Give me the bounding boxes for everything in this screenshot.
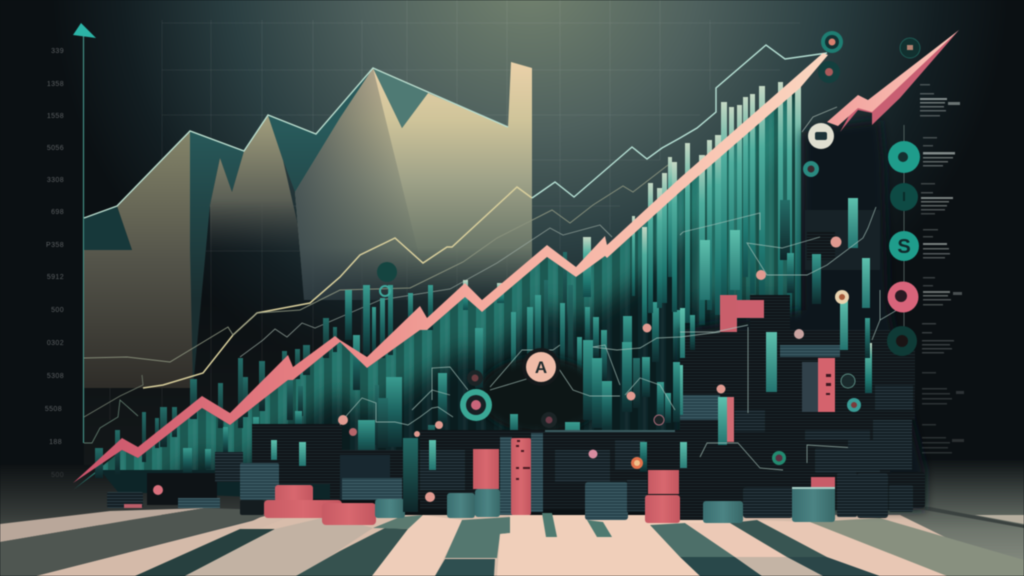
stack dark xyxy=(627,480,647,512)
icon: small teal xyxy=(803,161,819,177)
axis labels: 188 xyxy=(49,439,62,446)
area top line xyxy=(84,68,508,218)
base centre floor xyxy=(0,515,1024,576)
cylinder: pink tall xyxy=(473,449,499,489)
area: left fade on large tan xyxy=(295,68,430,300)
stack: left low xyxy=(178,498,220,508)
stripe: right dark teal xyxy=(680,557,762,576)
floor left xyxy=(0,465,300,576)
stripe: centre dark teal xyxy=(435,559,495,576)
y axis line xyxy=(82,36,84,443)
main rising arrow xyxy=(73,53,828,483)
caption 8 xyxy=(922,424,964,454)
icon: mid right rings xyxy=(772,374,861,465)
cylinder: pink dotted xyxy=(511,438,531,515)
line: grey lower xyxy=(240,225,612,357)
line: grey upper xyxy=(84,165,668,362)
pink blocks xyxy=(720,295,835,487)
icon: small pink dots xyxy=(153,236,842,502)
axis labels: 5056 xyxy=(47,145,64,152)
striped column xyxy=(500,437,512,515)
stripe: right pale xyxy=(685,523,787,557)
area: teal wedge xyxy=(190,131,244,388)
axis labels: 698 xyxy=(51,209,64,216)
icon: dark teal two xyxy=(890,183,918,211)
stripe: left band grey xyxy=(0,508,270,576)
area: middle tan xyxy=(210,115,304,252)
icon: cream disk xyxy=(835,290,849,304)
cylinder: pink lower right xyxy=(645,495,680,523)
line: mint xyxy=(532,45,827,198)
arrow tail line xyxy=(802,107,837,132)
axis labels: 500 xyxy=(51,472,64,479)
stripe: dark slanted xyxy=(135,529,275,576)
stripe: right pale low xyxy=(735,557,823,576)
cylinder: teal low xyxy=(703,501,743,523)
icon: top teal ring xyxy=(821,31,843,53)
arrow: dark lower facet xyxy=(840,30,959,132)
side captions xyxy=(920,84,964,454)
second pink arrow xyxy=(802,30,959,132)
caption 5 xyxy=(923,277,962,306)
dark base under arrow xyxy=(100,88,802,500)
teal glow under arrow xyxy=(73,88,803,500)
cylinder: teal big xyxy=(792,487,835,522)
stripe: right teal xyxy=(650,523,735,557)
striped column right xyxy=(531,433,543,512)
axis labels: 1358 xyxy=(47,81,64,88)
axis labels: 5308 xyxy=(47,373,64,380)
axis labels xyxy=(45,48,64,479)
stack right of centre xyxy=(585,482,628,520)
area: large tan xyxy=(295,62,532,300)
tall teal column xyxy=(403,438,418,512)
stripe: long pale right xyxy=(758,520,947,576)
axis labels: P358 xyxy=(46,242,64,249)
caption 3 xyxy=(921,183,953,214)
icon: salmon letter disk: A xyxy=(535,358,547,377)
line: lower left second xyxy=(84,400,138,443)
icon: dark disk xyxy=(887,326,917,356)
stacks dark right xyxy=(680,468,723,520)
line: yellow xyxy=(143,187,532,388)
connector spine xyxy=(903,125,905,330)
stripe: pale long xyxy=(37,516,292,576)
stripe: olive small xyxy=(373,515,423,529)
stack: dark base xyxy=(240,500,264,515)
stack left of centre xyxy=(342,478,402,500)
icon bubbles xyxy=(153,31,920,502)
stripe: pale center-left xyxy=(372,515,463,576)
icon: dark bubbles xyxy=(377,262,664,428)
dark circuit blocks xyxy=(147,210,915,510)
cylinder: pink upper right xyxy=(648,470,679,494)
pink cylinders and stacks xyxy=(107,420,925,525)
floor stripes xyxy=(0,505,1024,576)
area: teal notch xyxy=(373,68,428,128)
floor right xyxy=(760,460,1024,576)
cylinder: pink top xyxy=(275,485,313,502)
axis labels: 1558 xyxy=(47,113,64,120)
icon: pink disk xyxy=(888,282,918,312)
cylinder: teal xyxy=(375,499,405,518)
stripe: far right light xyxy=(975,515,1024,524)
caption 4 xyxy=(923,229,950,258)
caption 6 xyxy=(922,323,954,354)
group: small left stack xyxy=(107,492,143,508)
cylinder: pink wide xyxy=(264,500,342,518)
dark block field on right xyxy=(680,120,925,510)
icon: dark teal xyxy=(818,61,840,83)
icon: salmon letter disk xyxy=(522,348,560,386)
caption 1 xyxy=(920,84,960,116)
small pink tag xyxy=(124,504,142,508)
icon: orange glow xyxy=(631,457,643,469)
stripe: pale gray xyxy=(185,516,373,576)
secondary trend lines xyxy=(84,45,827,443)
icon: white disk xyxy=(808,123,834,149)
grid lines xyxy=(84,0,800,420)
pink panel xyxy=(818,358,835,412)
area: lower tan left xyxy=(84,131,193,388)
cylinder: grey lower xyxy=(475,489,500,517)
icon: teal swirl xyxy=(888,141,920,173)
axis labels: 5912 xyxy=(47,274,64,281)
icon: dollar teal xyxy=(889,231,919,261)
bars in right and lower block xyxy=(271,198,872,472)
stripe: dark teal left xyxy=(296,528,408,576)
front bars xyxy=(183,328,680,473)
stack: blue-grey xyxy=(240,463,279,500)
icon: dollar teal: S xyxy=(897,236,911,258)
arrow: light upper facet xyxy=(827,30,959,126)
y axis arrowhead xyxy=(73,23,96,38)
bars behind arrow xyxy=(95,82,801,478)
line: lower left xyxy=(84,375,143,417)
stripe: centre teal xyxy=(445,517,510,558)
dark shade behind central disk xyxy=(478,357,602,433)
stripe: right dark band xyxy=(730,520,827,557)
axis labels: 0302 xyxy=(47,340,64,347)
caption 2 xyxy=(923,137,955,166)
stripe: grey right xyxy=(810,518,1024,576)
area: teal wedge right xyxy=(268,68,373,192)
axis labels: 500 xyxy=(51,307,64,314)
stripe: pale centre xyxy=(497,515,762,576)
stripe: small teal two xyxy=(587,520,612,537)
stripe: far right dark line xyxy=(900,505,1024,528)
cylinder top highlight xyxy=(792,487,835,489)
axis labels: 3308 xyxy=(47,177,64,184)
circuit lines xyxy=(340,207,897,470)
stripe: left pale xyxy=(0,508,205,542)
icon: top right ring xyxy=(900,38,920,58)
axis labels: 5508 xyxy=(45,406,62,413)
axis labels: 339 xyxy=(51,48,64,55)
dots on cylinder xyxy=(516,440,530,480)
stack: dark left xyxy=(215,452,243,482)
area chart xyxy=(84,62,532,388)
cylinder: teal centre xyxy=(447,493,475,518)
area: dark teal left xyxy=(84,206,132,250)
lower background shade xyxy=(84,290,804,490)
stripe: left dark wedge xyxy=(0,515,265,576)
stripe: right dark band low xyxy=(787,557,880,576)
cylinder: pink front xyxy=(322,503,376,525)
bar chart mass under main arrow xyxy=(73,88,803,500)
caption 7 xyxy=(922,372,964,404)
stripe: small teal one xyxy=(542,513,557,537)
icon: teal ring centre xyxy=(460,389,492,421)
